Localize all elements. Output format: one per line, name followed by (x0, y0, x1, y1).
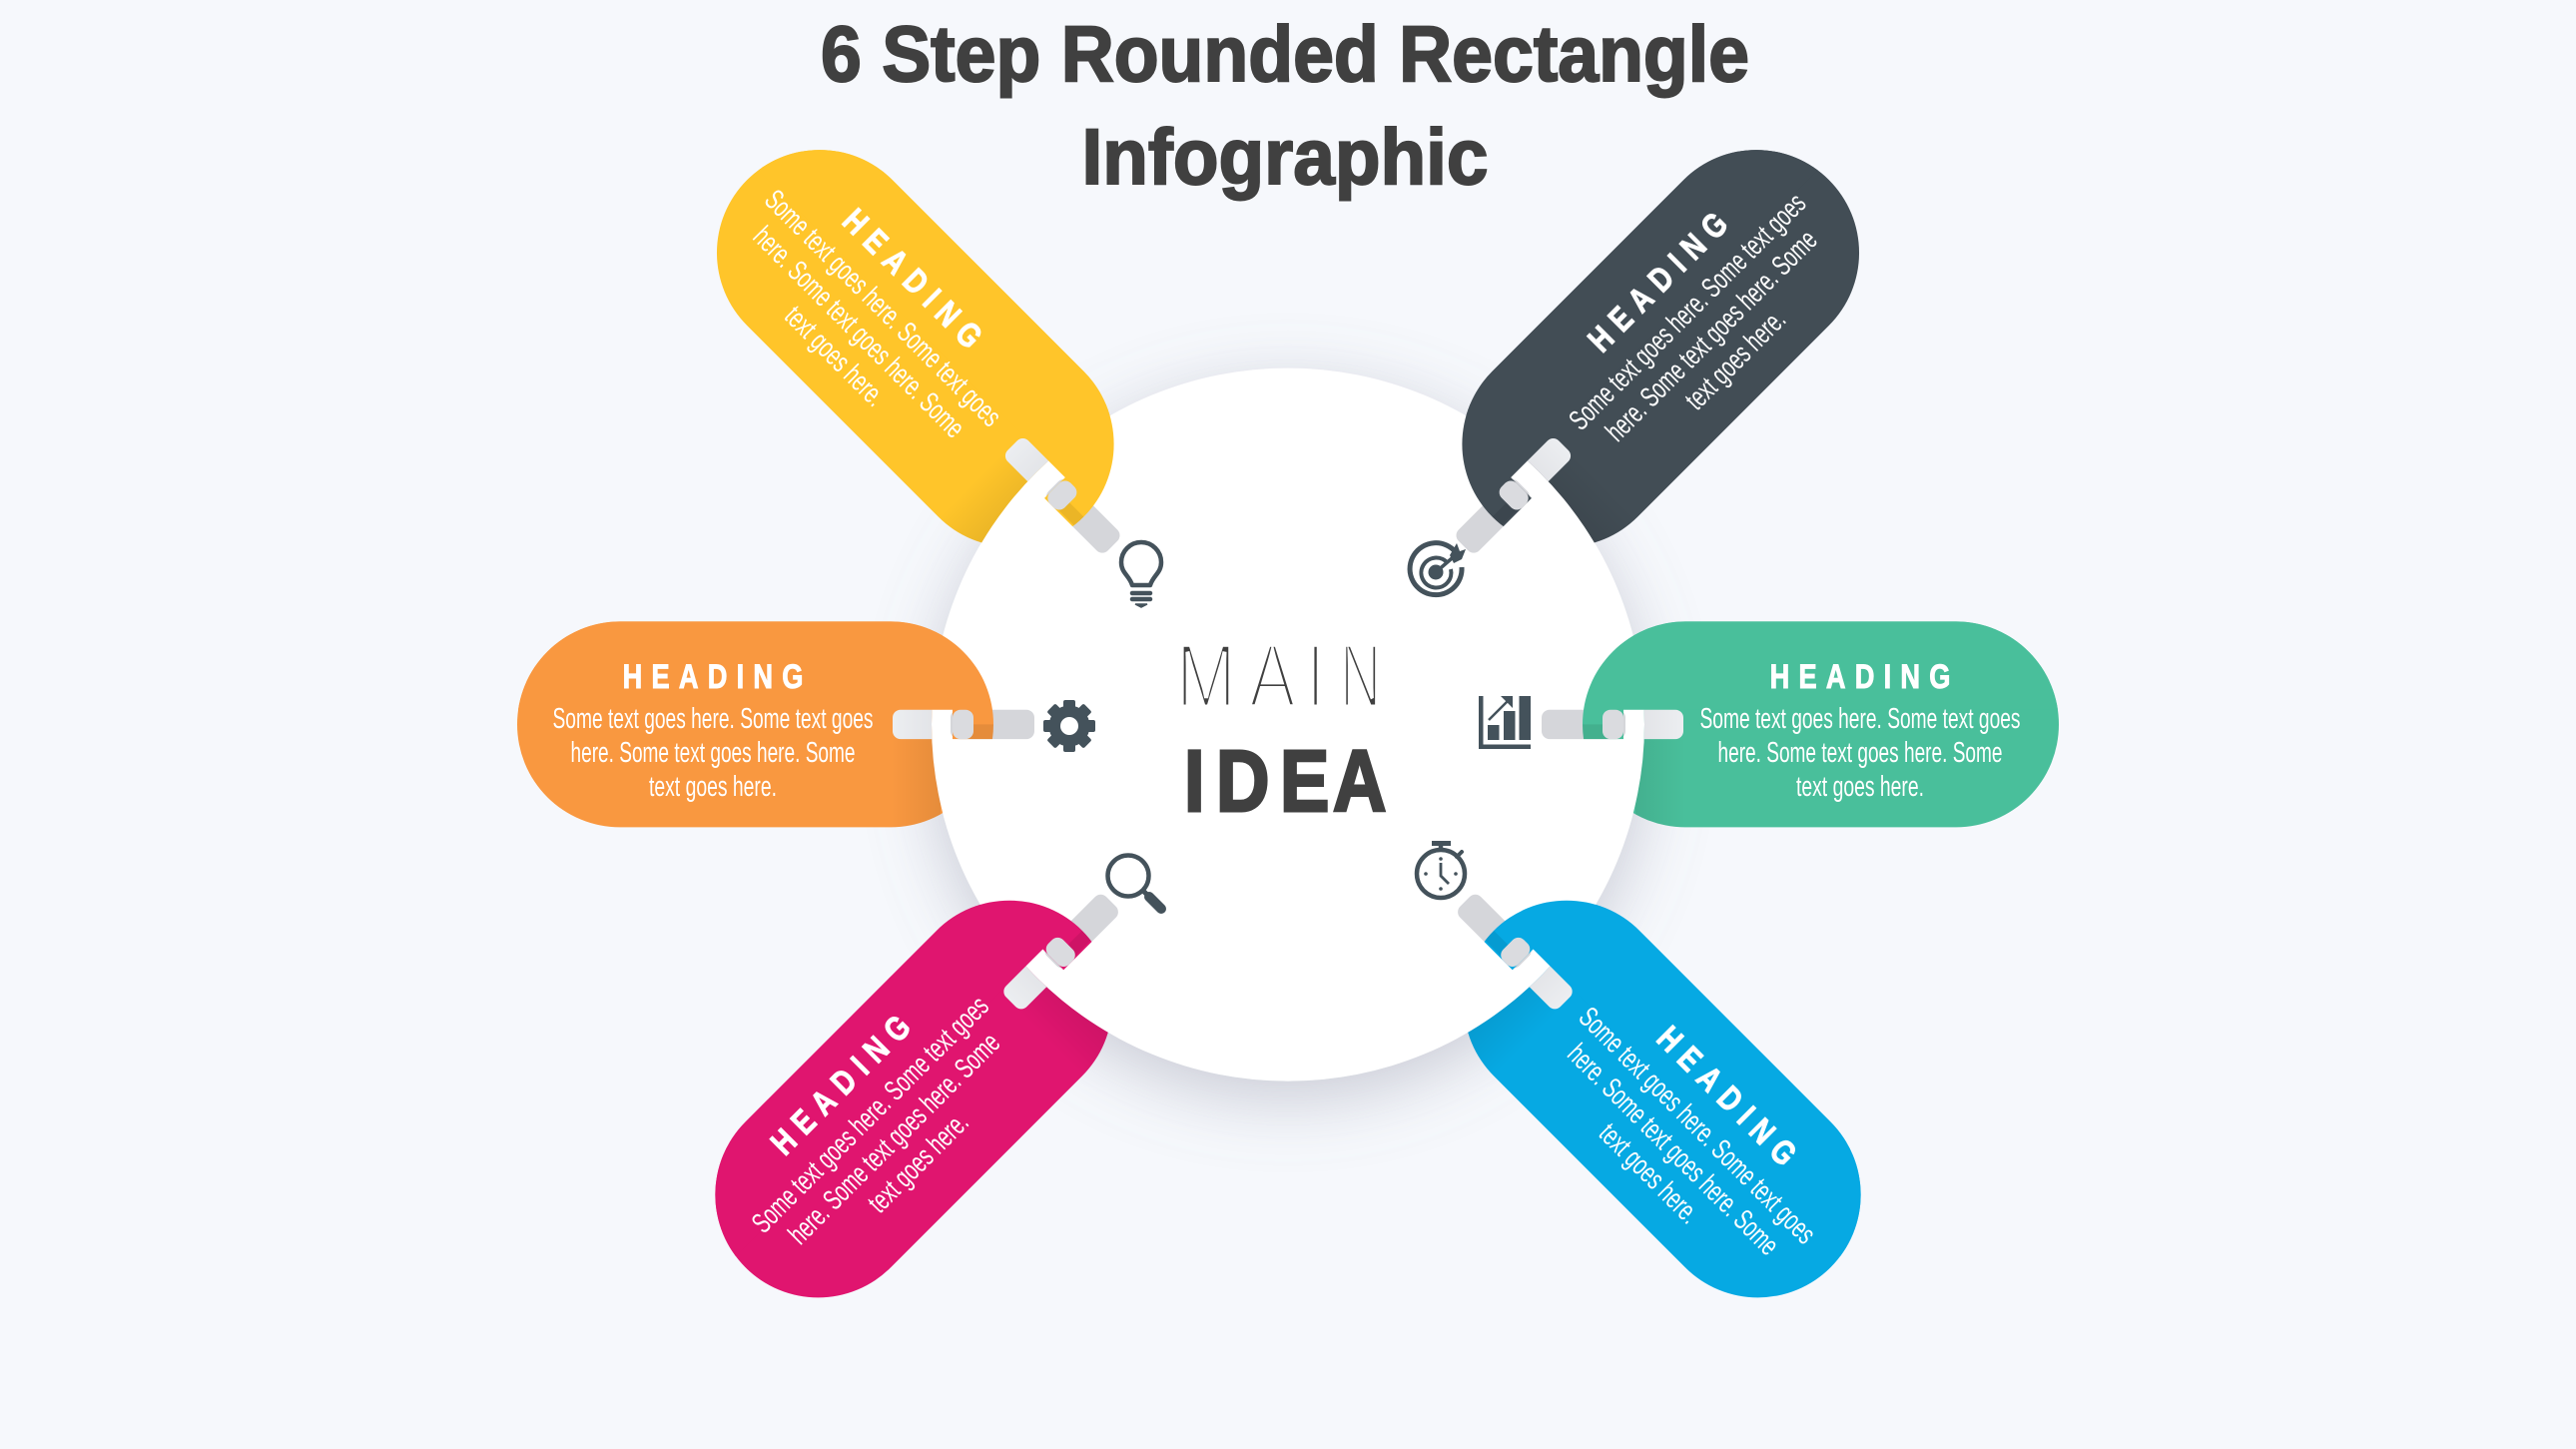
text: orange: HEADING (623, 657, 803, 696)
text: pink: text goes here. (862, 1106, 975, 1219)
main idea label: N (1340, 626, 1381, 727)
pill: dark (1456, 150, 1859, 553)
main idea label: I (1307, 626, 1324, 727)
text: blue: Some text goes here. Some text goes (1573, 1002, 1821, 1250)
central circle (932, 368, 1644, 1082)
title: Infographic (1082, 112, 1488, 201)
text: dark: text goes here. (1679, 304, 1792, 416)
panel: step dark (1408, 150, 1859, 597)
panel: step pink (715, 853, 1166, 1298)
icon: light bulb (1121, 542, 1161, 607)
text: dark (1531, 155, 1860, 484)
pill: yellow (717, 150, 1120, 553)
text: yellow: Some text goes here. Some text goes (758, 184, 1007, 433)
text: yellow: HEADING (835, 201, 990, 356)
text: pink (714, 958, 1043, 1287)
pill: pink (715, 895, 1118, 1298)
text: green: HEADING (1770, 657, 1950, 696)
title: 6 Step Rounded Rectangle (821, 9, 1749, 98)
title (821, 9, 1749, 201)
main idea label: IDEA (1184, 733, 1386, 830)
panel: step blue (1414, 841, 1861, 1298)
pill: blue (1458, 895, 1861, 1298)
text: blue (1525, 969, 1854, 1298)
text: dark: HEADING (1581, 205, 1735, 360)
text: orange (553, 657, 873, 803)
text: dark: Some text goes here. Some text goes (1564, 188, 1812, 436)
text: blue: text goes here. (1593, 1117, 1705, 1230)
panel: step green (1479, 621, 2059, 829)
main idea label (1176, 625, 1386, 830)
text: green (1699, 657, 2021, 803)
main idea label: M (1176, 625, 1236, 727)
text: orange: here. Some text goes here. Some (571, 737, 855, 769)
text: green: text goes here. (1796, 771, 1924, 803)
text: pink: HEADING (763, 1008, 918, 1162)
main idea label: A (1249, 625, 1296, 727)
icon: stopwatch (1417, 843, 1465, 898)
text: pink: Some text goes here. Some text goes (746, 991, 995, 1239)
text: blue: HEADING (1649, 1019, 1804, 1173)
icon: gear (1043, 700, 1095, 752)
text: orange: Some text goes here. Some text goes (553, 703, 873, 735)
pill: green (1542, 621, 2059, 829)
icon: target (1410, 543, 1466, 595)
text: yellow (710, 152, 1039, 481)
icon: magnifier (1108, 855, 1161, 909)
pill: orange (517, 621, 1034, 829)
text: blue: here. Some text goes here. Some (1561, 1038, 1785, 1262)
panel: step orange (517, 621, 1095, 829)
icon: bar chart (1479, 696, 1531, 749)
text: orange: text goes here. (649, 771, 777, 803)
panel: step yellow (717, 150, 1164, 608)
text: yellow: text goes here. (778, 300, 891, 413)
text: green: Some text goes here. Some text goes (1699, 703, 2021, 735)
text: dark: here. Some text goes here. Some (1600, 224, 1824, 448)
text: yellow: here. Some text goes here. Some (747, 221, 970, 444)
text: green: here. Some text goes here. Some (1717, 737, 2003, 769)
text: pink: here. Some text goes here. Some (783, 1027, 1006, 1251)
